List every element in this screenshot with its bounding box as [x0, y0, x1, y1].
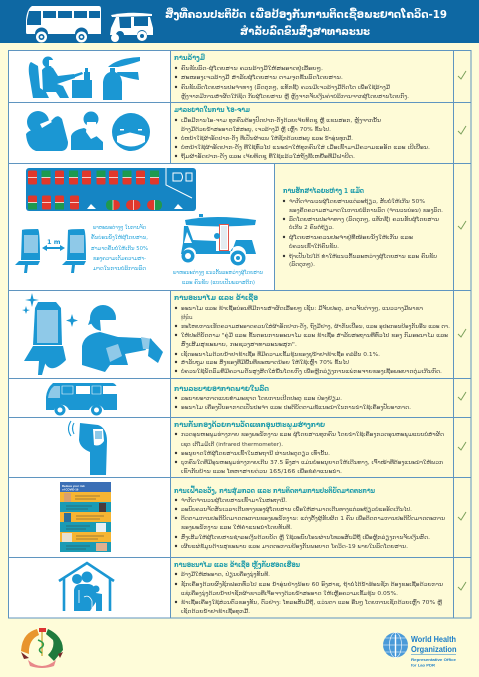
- title: ສິ່ງທີ່ຄວນປະຕິບັດ ເພື່ອປ້ອງກັນການຕິດເຊື້ອພະຍາດໂຄວິດ-19: [165, 7, 447, 21]
- panel: ventilation: [46, 383, 466, 416]
- check mark: [458, 71, 466, 79]
- text: cough etiquette list: ບໍ່ຫນ້າໃຊ້ຜ້າອັດປາກ-ດັງ ທີ່ໃຊ້ທົ່ວໄປ ແນະນຳໃຫ້ທຸກຄົນໃສ່ ເມື່ອເຂົ້າມາມີຄວາມແອອັດ ແລະ ເປິເປື້ອນ.: [181, 143, 430, 151]
- text: hand washing list: [175, 65, 409, 100]
- caption: seat spacing: ຂອງຄວາມເຕັມຄວາມສາ-: [93, 255, 146, 262]
- text: monitoring list: ຂອງພະນັກງານ ແລະ ໃຫ້ຄຳແນະນຳໂດຍທັນທີ.: [181, 524, 292, 531]
- text: hand washing list: ຫຼັງຈາກມີການສຳຜັດໃກ້ຊິດ ກັບຜູ້ໂດຍສານ ຫຼື ຫຼັງຈາກຈັບເງິນຄ່າບໍລິການຈາກຜູ້ໂດຍສານໂດຍກົງ.: [181, 93, 409, 100]
- text: monitoring list: [175, 497, 445, 550]
- panel: cleaning and disinfection: [22, 293, 466, 375]
- text: at home list: ຂ້າເຊື້ອເຄື່ອງໃຊ້ສ່ວນຕົວຂອງທັນ, ຕົວຢ່າງ: ໂທລະສັບມືຖື, ແວ່ນຕາ ແລະ ອື່ນໆ ໂດຍການເຊັດດ້ວຍເຫຼົ້າ 70% ຫຼື: [181, 599, 443, 606]
- poster: reduce your risk of COVID-19: of COVID-19: [62, 488, 79, 492]
- text: screening list: ເຂົາກັບບ້ານ ແລະ ໂທຫາສາຍດ່ວນ 165/166 ເພື່ອຂໍຄຳແນະນຳ.: [181, 468, 342, 475]
- icon: face mask: [112, 113, 150, 151]
- heading: cough etiquette: ມາລະຍາດໃນການ ໄອ-ຈາມ: [174, 106, 250, 114]
- text: hand washing list: ສະໜອງເຈວລ້າງມື ສຳລັບຜູ້ໂດຍສານ ຕາມຈຸດຂຶ້ນລົດໂດຍສານ.: [181, 74, 343, 81]
- text: monitoring list: ລະບົບຄວນຈັດສັນເວລາເດີນທາງຂອງຜູ້ໂດຍສານ ເພື່ອໃຫ້ສາມາດເດີນທາງແຕ່ລະຖ້ຽວບໍ່ແອອັດເກີນໄປ.: [181, 505, 412, 513]
- check mark: [458, 126, 466, 134]
- poster: reduce your risk of COVID-19: [60, 482, 111, 552]
- text: cough etiquette list: ບໍ່ຫນ້າໃຊ້ຜ້າອັດປາກ-ດັງ ທີ່ເປັນຜ້າແພ ໃຫ້ຊັກດ້ວຍສະບູ ແລະ ນ້ຳອຸ່ນທຸກມື້.: [181, 134, 353, 142]
- text: at home list: ແຊ່ເຄື່ອງນຸ່ງດ້ວຍນ້ຳຢາຊັກຜ້າຂາວທີ່ເຈືອຈາງດ້ວຍນ້ຳສະອາດ ໃຫ້ເຫຼືອຄວາມເຂັ້ມຂຸ້ນ 0.05%.: [181, 590, 398, 597]
- diagram: bus seating plan: [26, 168, 196, 211]
- check mark: [458, 329, 466, 337]
- heading: at home: ການອະນາໄມ ແລະ ຂ້າເຊື້ອ ຫຼັງກັບຮອດເຮືອນ: [174, 560, 300, 569]
- text: monitoring list: ສົ່ງເສີມໃຫ້ຜູ້ໂດຍສານຊຳລະເງິນດ້ວຍບັດ ຫຼື ໃຊ້ລະບົບໂອນຜ່ານໂທລະສັບມືຖື ເພື່ອຫຼີກລ່ຽງການຈັບເງິນສົດ.: [181, 534, 430, 541]
- caption: seat spacing: ຄັ້ນບ່ອນນັ່ງໃຫ້ຜູ້ໂດຍສານ,: [91, 234, 148, 241]
- text: ventilation list: ອະນາໄມ ເຄື່ອງປັບອາກາດເປັນປະຈຳ ແລະ ປະຕິບັດຕາມຂໍ້ແນະນຳໃນການນຳໃຊ້ເຄື່ອງປັບອາກາດ.: [181, 403, 411, 411]
- check mark: [458, 392, 466, 400]
- text: physical distancing list: (ລົດຕຸກໆ).: [289, 261, 315, 268]
- text: physical distancing list: ຂອງຄືດຄວາມສາມາດໃນການບໍລິການລົດ (ຈຳນວນບ່ອນ) ຂອງລົດ.: [289, 207, 443, 214]
- text: ventilation list: ລະບາຍອາກາດແບບທຳມະຊາດ ໂດຍການເປີດປະຕູ ແລະ ປ່ອງຢ້ຽມ.: [181, 394, 342, 402]
- text: ventilation list: [175, 394, 411, 411]
- text: cough etiquette list: ເມື່ອມີການໄອ-ຈາມ ທຸກຄົນຕ້ອງປົດປາກ-ດັງດ້ວຍເຈ້ຍທິດຊູ ຫຼື ແຂນສອກ, ຫຼັງຈາກນັ້ນ: [181, 116, 381, 125]
- logo: World Health Organization: Organization: [411, 645, 456, 654]
- panel: cough etiquette: [26, 106, 466, 161]
- text: at home list: ລ້າງມືໃຫ້ສະອາດ, ປ່ຽນເຄື່ອງນຸ່ງທັນທີ.: [181, 571, 270, 578]
- heading: ventilation: ການລະບາຍອາກາດພາຍໃນລົດ: [174, 385, 269, 393]
- logo: World Health Organization: for Lao PDR: [411, 662, 435, 668]
- heading: physical distancing: ການຮັກສາໄລຍະຫ່າງ 1 ແມັດ: [283, 186, 364, 195]
- text: cough etiquette list: ລ້າງມືດ້ວຍນ້ຳສະອາດໃສ່ສະບູ, ເຈວລ້າງມື ຫຼື ເຫຼົ້າ 70% ຂຶ້ນໄປ.: [181, 125, 331, 133]
- header banner: [0, 0, 479, 43]
- icon: coughing into elbow: [26, 111, 68, 151]
- text: physical distancing list: ຖ້າເປັນໄປໄດ້ ທຳໃຫ້ແນວກັ້ນລະຫວ່າງຜູ້ໂດຍສານ ແລະ ຄົນຂັບ: [289, 252, 438, 260]
- caption: tuk-tuk partition: [173, 269, 263, 286]
- check mark: [458, 221, 466, 229]
- text: cleaning list: ຢູ່ເທິງລົດເມ.: [181, 314, 193, 321]
- caption: seat spacing: [91, 224, 148, 272]
- heading: monitoring: ການເຝົ້າລະວັງ, ການສຸ່ມກວດ ແລະ ການຕິດຕາມການປະຕິບັດມາດຕະການ: [174, 485, 375, 496]
- text: cleaning list: ໃຫ້ປະຕິບັດຕາມ "ຄູ່ມື ແລະ ຂັ້ນຕອນການອະນາໄມ ແລະ ຂ້າເຊື້ອ ສຳລັບສະຖານທີ່ທົ່ວໄປ ຂອງ ກົມອະນາໄມ ແລະ: [181, 331, 448, 339]
- text: hand washing list: ຄົນຂັບລົດ-ຜູ້ໂດຍສານ ຄວນລ້າງມືໃຫ້ສະອາດຢູ່ເລື້ອຍໆ.: [181, 65, 323, 72]
- text: cough etiquette list: [175, 116, 430, 161]
- text: screening list: ກວດອຸນຫະພູມຮ່າງກາຍ ຂອງພະນັກງານ ແລະ ຜູ້ໂດຍສານທຸກຄົນ ໂດຍນຳໃຊ້ເຄື່ອງກວດອຸນຫະພູມແບບບໍ່ສຳຜັດ: [181, 431, 444, 438]
- icon: bus with open windows: [46, 383, 117, 416]
- heading: temperature screening: ການກັ່ນກອງດ້ວຍການວັດແທກອຸນຫະພູມຮ່າງກາຍ: [174, 420, 325, 430]
- text: cleaning list: ບໍ່ຄວນໃຊ້ພັດລົມທີ່ມີຄວາມດັນສູງສີດໃສ່ພື້ນໂດຍກົງ ເພື່ອຫຼີກລ່ຽງການແພ່ກະຈາຍຂອງເຊື້ອພະຍາດຕຸ່ມເກີນກົດ.: [181, 368, 442, 375]
- icon: driver with hand gel: [29, 56, 92, 98]
- icon: tuk-tuk with partition: [181, 214, 256, 266]
- logo: World Health Organization: [383, 632, 457, 668]
- icon: cleaner with mask and cloth: [82, 305, 163, 372]
- panel: at home: [59, 560, 466, 615]
- text: cleaning list: ສຳລັບຖູມ ແລະ ສິ່ງຂອງທີ່ມີພື້ນທີ່ຂະໜາດນ້ອຍ ໃຫ້ໃຊ້ເຫຼົ້າ 70% ຂຶ້ນໄປ: [181, 358, 350, 367]
- logo: World Health Organization: World Health: [411, 635, 456, 644]
- title: [165, 7, 447, 38]
- text: monitoring list: ເຜີຍແຜ່ຂໍ້ມູນດ້ານສຸຂະພາບ ແລະ ມາດຕະການປ້ອງກັນພະຍາດ ໂຄວິດ-19 ພາຍໃນລົດໂດຍສານ.: [181, 542, 408, 550]
- text: monitoring list: ຕິດຕາມການປະຕິບັດມາດຕະການຂອງພະນັກງານ: ແຕ່ງຕັ້ງຜູ້ຮັບຜິດ 1 ຄົນ ເພື່ອຕິດຕາມການປະຕິບັດມາດຕະການ: [181, 515, 445, 522]
- text: monitoring list: ຈຳກັດຈຳນວນຜູ້ໂດຍສານເຂົ້າມາໃນສະຖານີ.: [181, 497, 287, 504]
- icon: tuk-tuk: [110, 13, 153, 42]
- icon: bus: [26, 6, 101, 42]
- icon: sanitiser pump: [103, 57, 140, 100]
- text: screening list: ອະນຸຍາດໃຫ້ຜູ້ໂດຍສານເຂົ້າໃນສະຖານີ ຜ່ານປະຕູດຽວ ເທົ່ານັ້ນ.: [181, 450, 330, 457]
- icon: two seats one metre apart: [15, 229, 86, 273]
- panel: monitoring and enforcement: [60, 482, 466, 552]
- logo: World Health Organization: Representative Office: [411, 657, 457, 662]
- text: physical distancing list: ລົດໂດຍສານປະຈຳທາງ (ລົດຕຸກໆ, ແທັກຊີ້) ຄວນຮັບຜູ້ໂດຍສານ: [289, 216, 439, 223]
- panel: temperature screening: [68, 420, 466, 475]
- text: cough etiquette list: ຖິ້ມຜ້າອັດປາກ-ດັງ ແລະ ເຈ້ຍທິດຊູ ທີ່ໃຊ້ແລ້ວໃສ່ຖັງຂີ້ເຫຍື້ອທີ່ມີຝາປິດ.: [181, 152, 355, 161]
- heading: cleaning and disinfection: ການອະນາໄມ ແລະ ຂ້າເຊື້ອ: [174, 293, 258, 302]
- text: physical distancing list: ຈຳກັດຈຳນວນຜູ້ໂດຍສານແຕ່ລະຖ້ຽວ, ສັບບໍ່ໃຫ້ເກີນ 50%: [289, 198, 425, 205]
- caption: tuk-tuk partition: ແລະ ຄົນຂັບ (ແບບເປັນພລາສຕິກ): [182, 278, 255, 286]
- panel: hand washing: [29, 53, 466, 100]
- text: screening list: [175, 431, 444, 475]
- text: screening list: ເຊດ ເຕີໂມມິເຕີ (infrared thermometer).: [181, 441, 283, 448]
- panel: physical distancing: [15, 168, 466, 286]
- text: cleaning list: ສົ່ງເສີມສຸຂະພາບ, ກະຊວງສາທາລະນະສຸກ".: [181, 341, 297, 348]
- text: at home list: [175, 571, 443, 615]
- text: at home list: ເຊັດດ້ວຍນ້ຳຢາຂ້າເຊື້ອທຸກມື້.: [181, 608, 250, 615]
- caption: seat spacing: ສາມາດຄັ້ນບໍ່ໃຫ້ເກີນ 50%: [91, 245, 148, 252]
- text: physical distancing list: ຜູ້ໂດຍສານຄວນປະຈຳຢູ່ທີ່ໜ້ອຍນັ່ງໃຫ້ເກັ່ນ ແລະ: [289, 234, 414, 241]
- logo: Lao Ministry of Health: [21, 628, 63, 668]
- poster: reduce your risk of COVID-19: Reduce your risk: [62, 484, 85, 488]
- text: at home list: ຊັກເຄື່ອງດ້ວຍຜົງຊັກຟອກທົ່ວໄປ ແລະ ນ້ຳອຸ່ນຢ່າງນ້ອຍ 60 ອົງສາຊ, ຖ້າບໍ່ໄດ້ນ້ຳຮ້ອນຊັກ ຕ້ອງຂະເຊື້ອດ້ວຍການ: [181, 580, 443, 588]
- icon: infrared thermometer: [68, 421, 107, 475]
- caption: seat spacing: ມາດໃນການບໍລິການລົດ: [93, 265, 146, 272]
- heading: hand washing: ການລ້າງມື: [174, 53, 206, 62]
- caption: tuk-tuk partition: ພາຫະນະຕ່າງໆ ແນວກັ້ນລະຫວ່າງຜູ້ໂດຍສານ: [173, 269, 263, 276]
- text: cleaning list: ເຊັດອະນາໄມດ້ວຍນ້ຳຢາຂ້າເຊື້ອ ທີ່ມີຄວາມເຂັ້ມຂຸ້ນຂອງຢູນ້ຳຢາຂ້າເຊື້ອ ຄລໍລີນ 0.1%.: [181, 350, 380, 358]
- check mark: [458, 582, 466, 590]
- text: physical distancing list: ບໍ່ຄວນເຂົ້າໃກ້ຄົນຂັບ.: [289, 243, 339, 250]
- check mark: [458, 442, 466, 450]
- text: cleaning list: ອະນາໄມ ແລະ ຂ້າເຊື້ອບ່ອນທີ່ມີການສຳຜັດເລື້ອຍໆ ເຊັ່ນ: ມືຈັບປະຕູ, ລາວຈັບຕ່າງໆ, ແນວວາງມືພາຂາ: [181, 304, 423, 312]
- icon: two seats one metre apart: 1 m: [47, 238, 61, 246]
- text: cleaning list: [175, 304, 450, 375]
- check mark: [458, 512, 466, 520]
- icon: clean seat: [22, 293, 78, 375]
- text: hand washing list: ຄົນຂັບລົດໂດຍສານປະຈຳທາງ (ລົດຕຸກໆ, ແທັກຊີ້) ຄວນມີເຈວລ້າງມືຕິດໂຕ ເພື່ອໃຊ້ລ້າງມື: [181, 84, 390, 91]
- title: ສຳລັບລົດຂົນສົ່ງສາທາລະນະ: [240, 24, 370, 38]
- icon: family inside house: [59, 563, 114, 611]
- text: physical distancing list: [283, 198, 443, 268]
- text: cleaning list: ຮະໂຫຍການເຮັດຄວາມສະອາດຄວນໃສ່ຜ້າອັດປາກ-ດັງ, ຖົງມືຢາງ, ຜ້າກັນເປື້ອນ, ແລະ ອຸປະກອນປ້ອງກັນອື່ນ ແລະ ຕາ.: [181, 322, 450, 330]
- text: physical distancing list: ບໍ່ເກີນ 2 ຄົນຕໍ່ຖ້ຽວ.: [289, 224, 334, 231]
- caption: seat spacing: ພາຫະນະຕ່າງໆ ໃນການຈັດ: [93, 224, 146, 231]
- icon: sneezing into tissue: [71, 112, 103, 150]
- text: screening list: ບຸກຄົນໃດທີ່ມີອຸນຫະພູມຮ່າງກາຍເກີນ 37.5 ອົງສາ ແມ່ນບໍ່ອະນຸຍາດໃຫ້ເດີນທາງ, ເຈົ້າໜ້າທີ່ຕ້ອງແນະນຳໃຫ້ພວກ: [181, 459, 443, 466]
